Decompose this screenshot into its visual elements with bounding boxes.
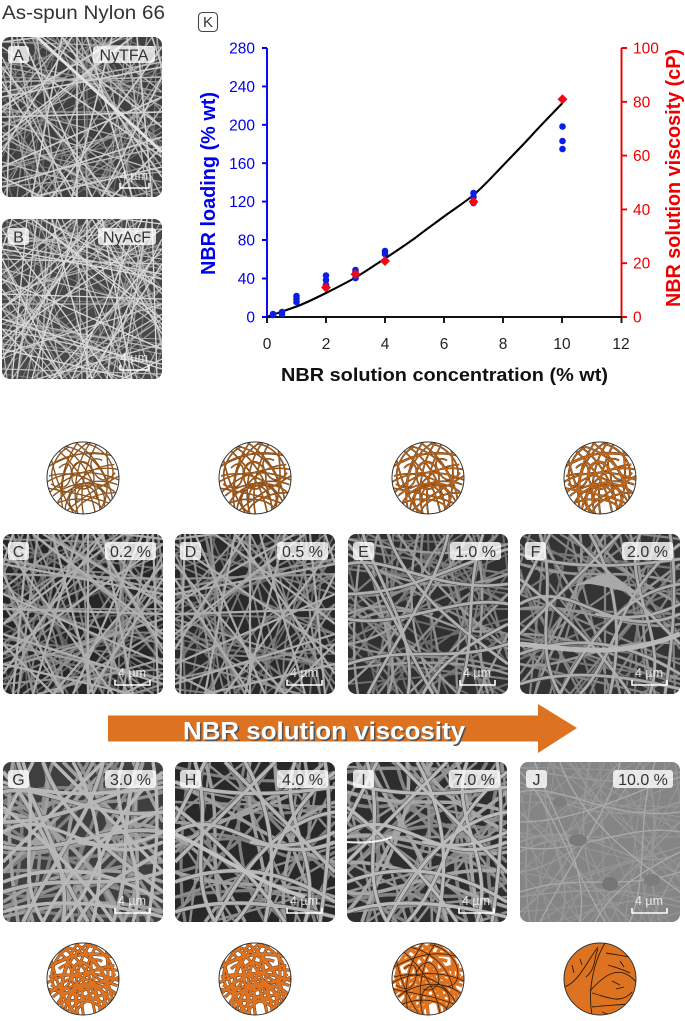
strands <box>220 944 290 1014</box>
label I <box>353 770 374 789</box>
fit curve <box>267 103 562 317</box>
schematic circle: 1.0 % <box>392 442 464 514</box>
panel G: 3.0 % <box>3 762 163 922</box>
schematic circle: 2.0 % <box>564 442 636 514</box>
panel B: NyAcF micrograph <box>2 219 162 379</box>
label D <box>180 542 201 561</box>
label 7.0 %: 7.0 % <box>454 772 495 789</box>
panel E: 1.0 % <box>348 534 508 694</box>
strands <box>564 442 636 514</box>
label B <box>8 228 29 246</box>
right axis: 20 <box>633 256 651 272</box>
label I: I <box>361 772 366 789</box>
x axis: 8 <box>499 336 507 353</box>
scale bar: 4 µm <box>635 894 663 908</box>
panel D: 0.5 % <box>175 534 335 694</box>
scale bar <box>115 894 150 913</box>
scale bar: 4 µm <box>120 351 148 365</box>
red viscosity points <box>321 94 568 292</box>
label B: B <box>13 230 24 246</box>
scale bar: 4 µm <box>118 666 146 680</box>
right axis: 40 <box>633 202 651 219</box>
label NyTFA: NyTFA <box>100 48 149 64</box>
label C: C <box>13 544 24 561</box>
fibers J <box>520 762 680 922</box>
panel J: 10.0 % <box>520 762 680 922</box>
right axis: 80 <box>633 94 651 112</box>
chart: NBR loading and viscosity vs concentration <box>198 40 685 385</box>
label 0.5 %: 0.5 % <box>282 544 323 561</box>
x axis: 12 <box>612 336 630 353</box>
label J: J <box>532 772 540 789</box>
panel H: 4.0 % <box>175 762 335 922</box>
x axis: 4 <box>381 336 390 353</box>
fibers F <box>520 534 680 694</box>
x axis: 6 <box>440 336 448 353</box>
left axis: 0 <box>246 310 255 326</box>
scale bar: 4 µm <box>290 894 318 908</box>
scale bar: 4 µm <box>463 666 491 680</box>
schematic circle: 3.0 % <box>46 942 120 1016</box>
strands <box>48 944 118 1014</box>
left axis: 40 <box>238 271 255 288</box>
label 2.0 %: 2.0 % <box>627 544 668 561</box>
strands <box>564 943 636 1015</box>
label NyAcF: NyAcF <box>103 230 151 246</box>
schematic circle: 7.0 % <box>392 942 464 1016</box>
label 3.0 %: 3.0 % <box>110 772 151 789</box>
label 1.0 %: 1.0 % <box>455 544 496 561</box>
label F <box>525 542 546 561</box>
label E: E <box>358 544 369 561</box>
scale bar <box>459 894 494 913</box>
fibers G <box>3 762 163 922</box>
label 4.0 %: 4.0 % <box>282 772 323 789</box>
schematic circle: 10.0 % <box>564 943 636 1015</box>
fibers I <box>347 762 507 922</box>
fibers C <box>3 534 163 694</box>
right axis: 60 <box>633 148 651 165</box>
left axis: 200 <box>229 118 255 134</box>
schematic circle: 0.5 % <box>218 442 292 514</box>
scale bar <box>287 894 322 913</box>
x axis <box>263 317 630 353</box>
x axis: 2 <box>322 336 330 353</box>
fibers D <box>175 534 335 694</box>
strands <box>392 442 464 514</box>
panel label K <box>198 12 218 32</box>
panel C: 0.2 % <box>3 534 163 694</box>
scale bar <box>115 666 150 685</box>
strands <box>48 442 118 514</box>
left axis: 120 <box>229 194 255 211</box>
arrow: NBR solution viscosity <box>108 704 577 753</box>
panel I: 7.0 % <box>347 762 507 922</box>
left axis <box>229 40 267 326</box>
scale bar: 4 µm <box>290 666 318 680</box>
left axis: 280 <box>229 40 255 58</box>
panel label K: K <box>203 14 213 31</box>
label D: D <box>185 544 196 561</box>
label H: H <box>185 772 196 789</box>
scale bar <box>632 666 667 685</box>
right axis <box>622 40 659 326</box>
left axis: 240 <box>229 79 255 96</box>
label F: F <box>531 544 541 561</box>
label G <box>8 770 29 789</box>
label A <box>8 46 29 64</box>
label J <box>526 770 547 789</box>
label H <box>180 770 201 789</box>
x axis: 10 <box>553 336 571 353</box>
label 10.0 %: 10.0 % <box>618 772 668 789</box>
panel F: 2.0 % <box>520 534 680 694</box>
x axis: 0 <box>263 336 272 353</box>
label E <box>353 542 374 561</box>
scale bar: 4 µm <box>118 894 146 908</box>
scale bar: 4 µm <box>635 666 663 680</box>
scale bar: 4 µm <box>120 169 148 183</box>
fibers H <box>175 762 335 922</box>
label A: A <box>13 48 24 64</box>
left axis: 160 <box>229 156 255 173</box>
scale bar <box>287 666 322 685</box>
panel A: NyTFA micrograph <box>2 37 162 197</box>
schematic circle: 4.0 % <box>218 942 292 1016</box>
scale bar <box>632 894 667 913</box>
scale bar <box>460 666 495 685</box>
fibers A <box>2 37 162 197</box>
left axis: 80 <box>238 232 255 250</box>
right axis: 100 <box>633 40 659 58</box>
scale bar: 4 µm <box>462 894 490 908</box>
blue loading points <box>270 123 566 318</box>
fibers B <box>2 219 162 379</box>
label C <box>8 542 29 561</box>
x axis title: NBR solution concentration (% wt) <box>281 364 608 385</box>
strands <box>220 442 290 514</box>
right axis: 0 <box>633 310 642 326</box>
label 0.2 %: 0.2 % <box>110 544 151 561</box>
strands <box>392 944 464 1014</box>
arrow label: NBR solution viscosity <box>183 718 465 746</box>
right axis title: NBR solution viscosity (cP) <box>663 49 685 307</box>
fibers E <box>348 534 508 694</box>
schematic circle: 0.2 % <box>46 442 120 514</box>
left axis title: NBR loading (% wt) <box>198 92 220 275</box>
label G: G <box>12 772 25 789</box>
title: As-spun Nylon 66: As-spun Nylon 66 <box>2 3 165 24</box>
